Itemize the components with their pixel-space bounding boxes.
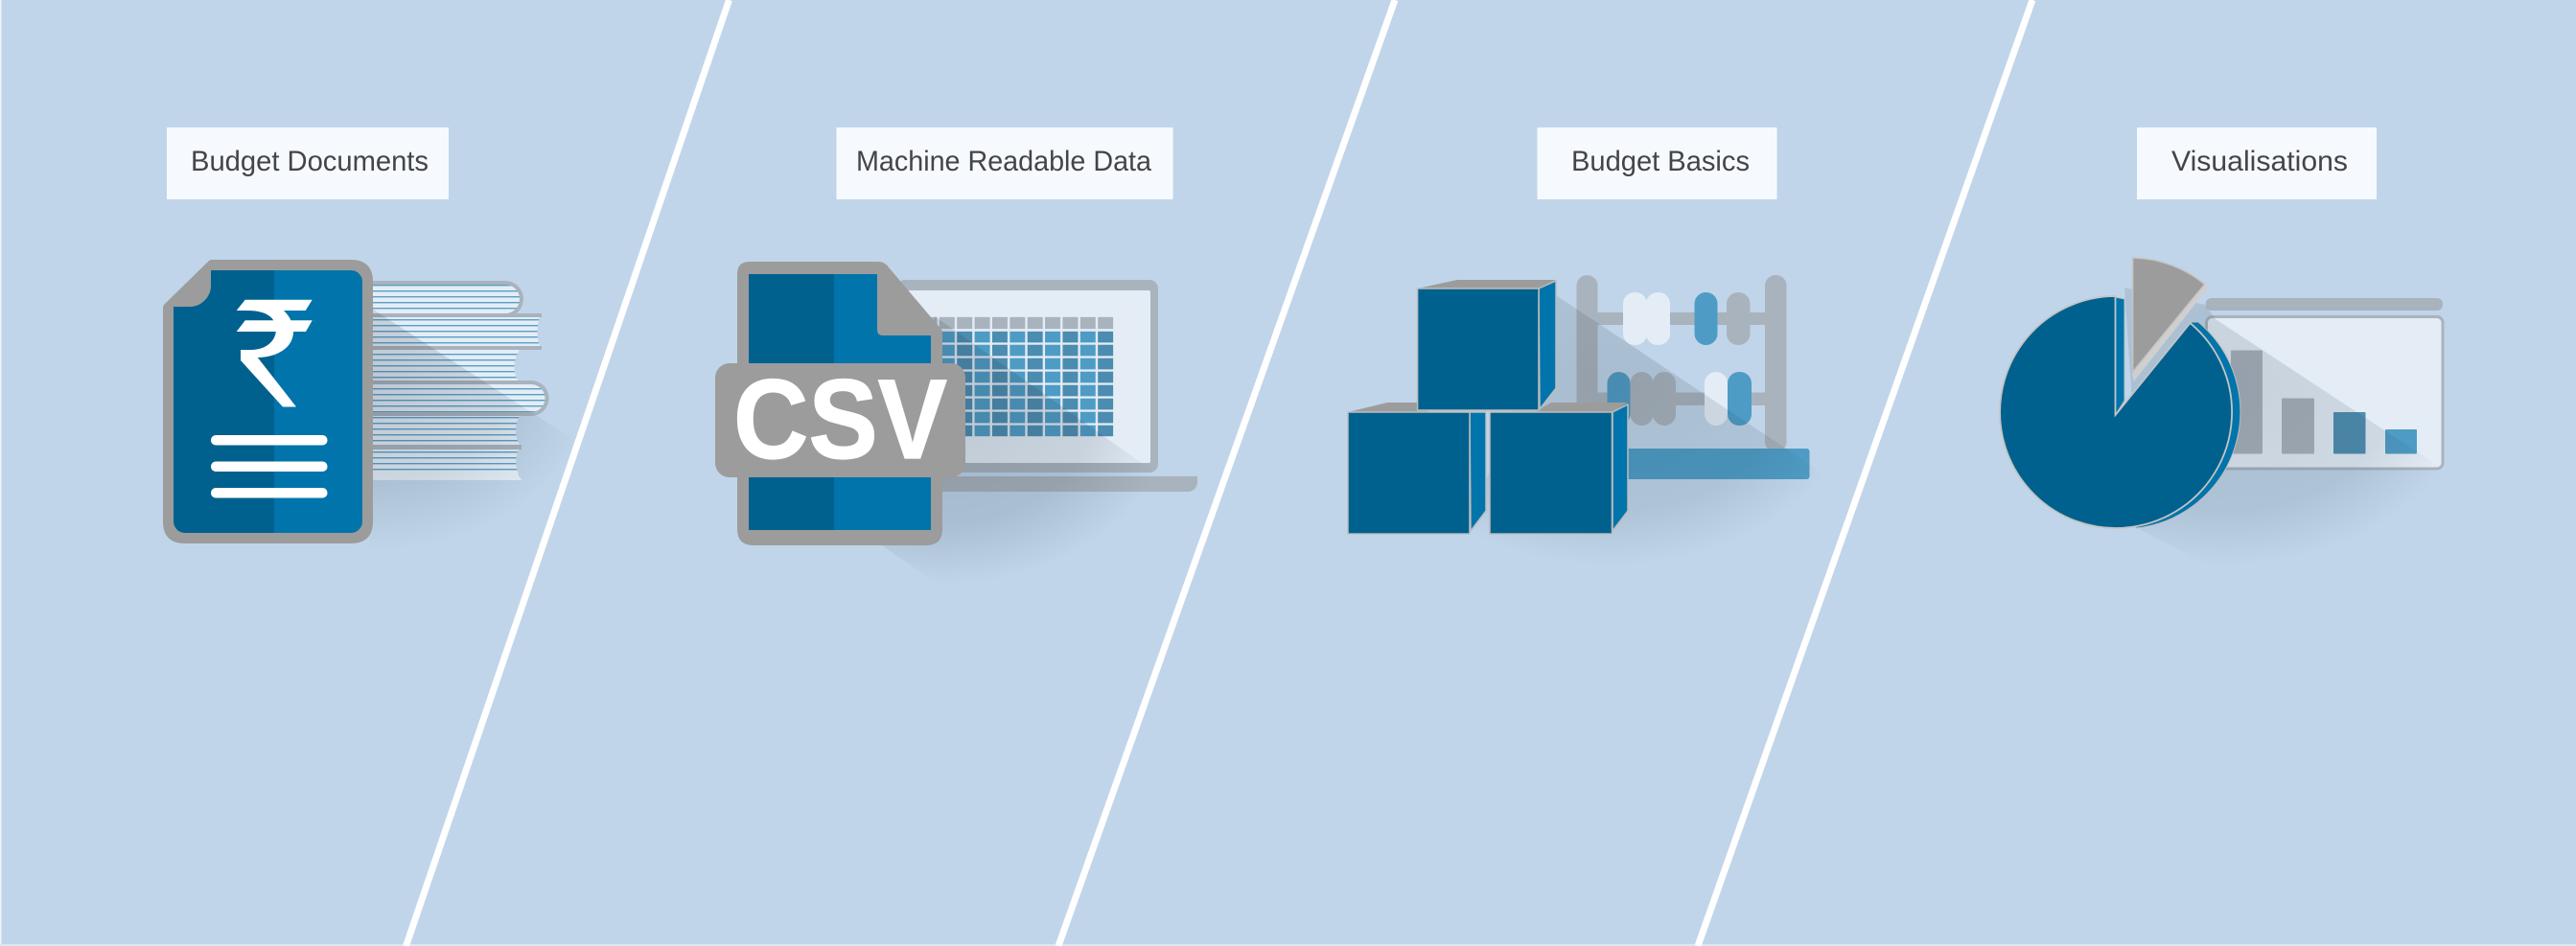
heading: budget documents — [167, 127, 449, 199]
heading: budget documents: Budget Documents — [191, 146, 429, 177]
pie main slice — [2000, 296, 2232, 528]
heading: visualisations: Visualisations — [2171, 146, 2348, 177]
icon: abacus — [1576, 275, 1810, 479]
icon: rupee document — [163, 260, 373, 543]
long shadow: cubes — [1467, 295, 1869, 671]
long shadow: documents — [369, 307, 614, 613]
icon: csv file — [715, 262, 965, 545]
pie back layer — [2115, 297, 2240, 528]
icon: stack of books — [369, 281, 548, 480]
panel: visualisations — [2000, 127, 2512, 671]
heading: budget basics: Budget Basics — [1571, 146, 1750, 177]
icon: stacked cubes — [1348, 280, 1628, 534]
divider: third slanted line — [1698, 0, 2032, 946]
divider: second slanted line — [1058, 0, 1395, 946]
heading: budget basics — [1538, 127, 1777, 199]
panel: budget basics — [1348, 127, 1869, 671]
cube: top — [1418, 280, 1556, 410]
long shadow: csv file — [882, 316, 1198, 671]
divider: first slanted line — [406, 0, 729, 946]
icon: bar chart window — [2206, 298, 2443, 469]
text lines on document — [211, 435, 328, 498]
heading: visualisations — [2137, 127, 2377, 199]
icon: laptop with data grid — [896, 280, 1197, 492]
panel: budget documents — [163, 127, 548, 543]
cube: bottom left — [1348, 403, 1486, 534]
pie detached slice — [2132, 258, 2209, 381]
heading: machine readable data: Machine Readable Data — [856, 146, 1151, 177]
icon: rupee symbol — [237, 300, 313, 406]
long shadow: pie chart — [2124, 288, 2512, 671]
cube: bottom right — [1490, 403, 1628, 534]
panel: machine readable data — [715, 127, 1198, 671]
icon: pie chart — [2000, 258, 2240, 528]
heading: machine readable data — [836, 127, 1173, 199]
icon: csv file: CSV — [733, 357, 947, 483]
